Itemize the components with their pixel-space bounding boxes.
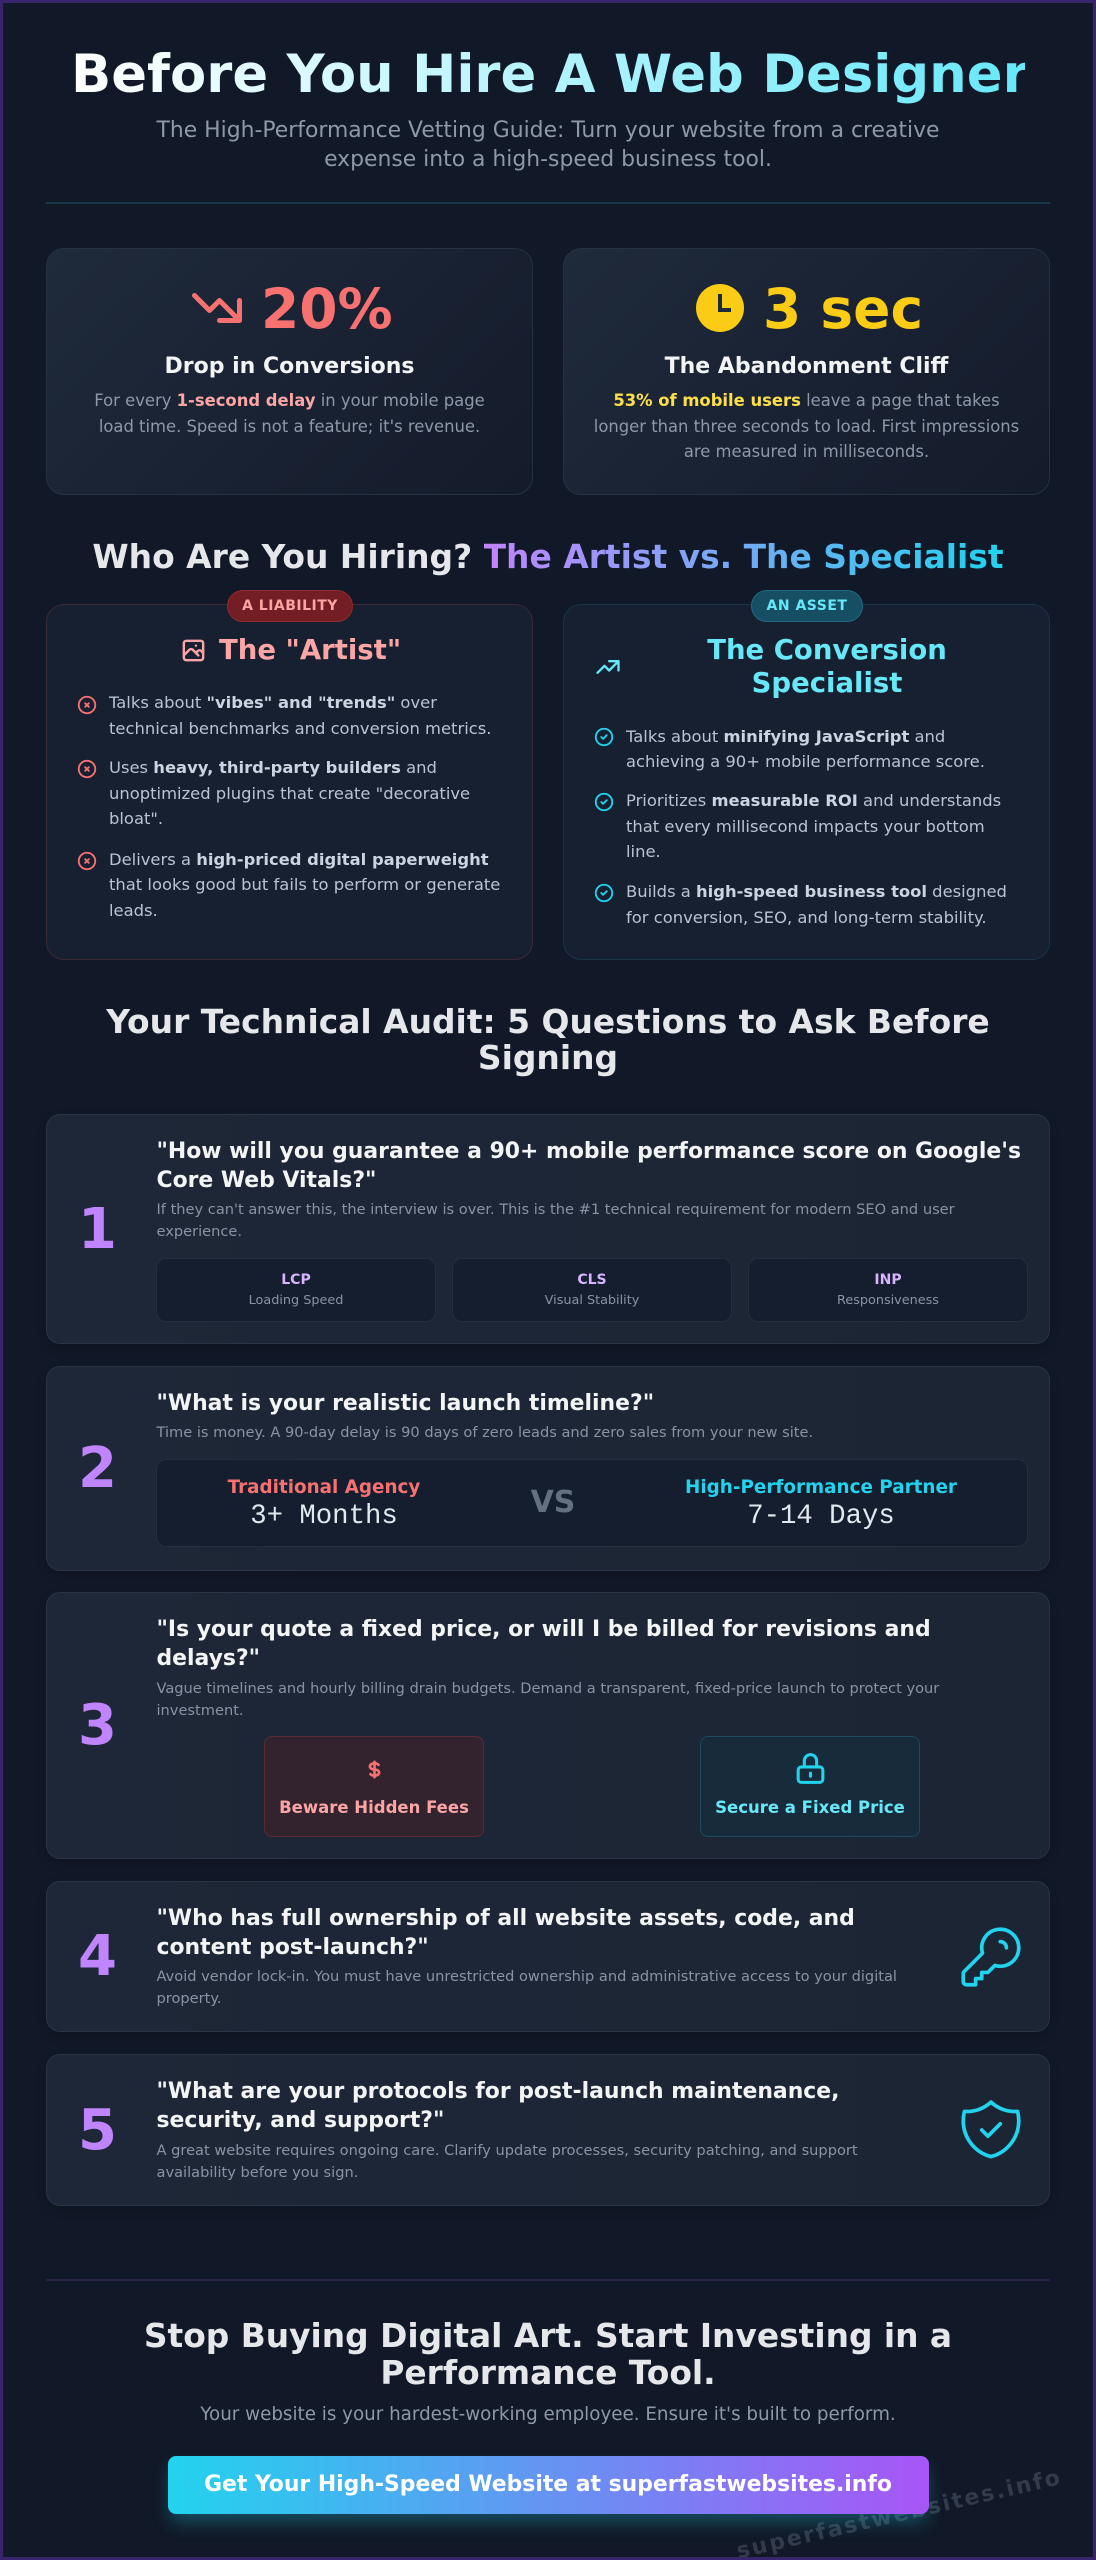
stat description: 53% of mobile users leave a page that takes xyxy=(613,391,1000,410)
panel: 20% stat xyxy=(46,248,533,495)
list item xyxy=(78,760,96,778)
stat description: For every 1-second delay in your mobile page xyxy=(94,391,485,410)
panel: question 4 xyxy=(46,1881,1050,2032)
subtitle: The High-Performance Vetting Guide: Turn your website from a creative xyxy=(156,118,940,143)
list text: Talks about "vibes" and "trends" over xyxy=(109,693,437,712)
icon: key xyxy=(961,1927,1021,1987)
call to action button xyxy=(168,2456,928,2514)
subtitle xyxy=(156,118,940,172)
badge: an asset: AN ASSET xyxy=(767,598,847,614)
list text xyxy=(108,693,491,738)
metric: LCP: LCP xyxy=(281,1272,311,1288)
description: availability before you sign. xyxy=(156,2164,358,2181)
number: 5 xyxy=(78,2098,117,2163)
icon: photograph xyxy=(182,640,204,662)
list text: unoptimized plugins that create "decorative xyxy=(109,784,470,803)
callout: fixed price xyxy=(700,1736,920,1837)
question: Core Web Vitals?" xyxy=(156,1168,376,1193)
icon: lock xyxy=(796,1753,824,1784)
list text: for conversion, SEO, and long-term stability. xyxy=(626,908,987,927)
stat description: longer than three seconds to load. First impressions xyxy=(594,417,1019,436)
question: "How will you guarantee a 90+ mobile performance score on Google's xyxy=(156,1139,1021,1164)
question: "What is your realistic launch timeline?" xyxy=(156,1391,654,1416)
icon: dollar xyxy=(368,1760,380,1778)
list item xyxy=(78,696,96,714)
list text: leads. xyxy=(109,901,158,920)
description: property. xyxy=(156,1990,222,2007)
panel: question 3 xyxy=(46,1592,1050,1859)
panel: question 2 xyxy=(46,1366,1050,1571)
list item xyxy=(594,792,614,812)
label: Beware Hidden Fees xyxy=(279,1798,469,1817)
question: "Is your quote a fixed price, or will I be billed for revisions and xyxy=(156,1617,931,1642)
description: Avoid vendor lock-in. You must have unrestricted ownership and administrative access to your digital xyxy=(156,1968,897,1985)
question: delays?" xyxy=(156,1646,260,1671)
question: security, and support?" xyxy=(156,2108,444,2133)
list text: Prioritizes measurable ROI and understands xyxy=(626,791,1001,810)
list text: Builds a high-speed business tool designed xyxy=(626,882,1007,901)
metric: INP: INP xyxy=(874,1272,902,1288)
heading: technical audit: Signing xyxy=(478,1038,618,1077)
heading: technical audit xyxy=(106,1002,990,1077)
versus: VS xyxy=(531,1485,575,1520)
number: 1 xyxy=(78,1197,117,1262)
question: "Who has full ownership of all website assets, code, and xyxy=(156,1906,855,1931)
stat description xyxy=(94,391,485,436)
card heading: The "Artist" xyxy=(219,634,401,666)
card heading: The Conversion xyxy=(707,634,947,666)
list text xyxy=(109,850,500,920)
closing heading: Performance Tool. xyxy=(380,2354,716,2392)
description: Time is money. A 90-day delay is 90 days of zero leads and zero sales from your new site. xyxy=(156,1424,813,1441)
list text: technical benchmarks and conversion metrics. xyxy=(109,719,491,738)
panel: 3 sec stat xyxy=(563,248,1050,495)
icon: trending down xyxy=(192,293,242,323)
list text xyxy=(626,726,985,771)
description: Vague timelines and hourly billing drain budgets. Demand a transparent, fixed-price launch to protect your xyxy=(156,1680,939,1697)
list text: bloat". xyxy=(109,809,163,828)
icon: clock xyxy=(696,284,744,332)
closing heading: Stop Buying Digital Art. Start Investing in a xyxy=(144,2317,952,2355)
traditional agency xyxy=(228,1477,420,1532)
metric: CLS: Visual Stability xyxy=(545,1293,639,1308)
list text: Uses heavy, third-party builders and xyxy=(109,758,437,777)
closing heading xyxy=(144,2317,952,2392)
metric: CLS: CLS xyxy=(577,1272,607,1288)
question xyxy=(156,2079,839,2133)
question xyxy=(156,1906,855,1960)
stat number: 20% xyxy=(261,277,393,341)
badge: a liability: A LIABILITY xyxy=(242,598,338,614)
question xyxy=(156,1139,1021,1193)
number: 2 xyxy=(78,1436,117,1501)
closing subtext: Your website is your hardest-working employee. Ensure it's built to perform. xyxy=(200,2404,896,2425)
metric: LCP xyxy=(156,1258,436,1322)
icon: trending up xyxy=(596,660,620,674)
card heading: Specialist xyxy=(752,667,902,699)
panel: question 5 xyxy=(46,2054,1050,2206)
timeline comparison xyxy=(156,1459,1028,1547)
description xyxy=(156,1680,940,1719)
badge: an asset xyxy=(751,590,863,622)
list text: achieving a 90+ mobile performance score. xyxy=(626,752,985,771)
metric: INP: Responsiveness xyxy=(837,1293,939,1308)
question: content post-launch?" xyxy=(156,1935,429,1960)
stat heading: Drop in Conversions xyxy=(164,354,415,379)
list item xyxy=(594,884,614,902)
stat description: load time. Speed is not a feature; it's revenue. xyxy=(99,417,480,436)
traditional agency: Traditional Agency xyxy=(228,1477,420,1498)
list text: Delivers a high-priced digital paperweight xyxy=(109,850,489,868)
list text: that looks good but fails to perform or generate xyxy=(109,875,500,894)
metric: CLS xyxy=(452,1258,732,1322)
description xyxy=(156,2142,858,2181)
number: 3 xyxy=(78,1693,117,1758)
traditional agency: 3+ Months xyxy=(250,1501,398,1532)
list item xyxy=(594,728,614,746)
description: investment. xyxy=(156,1702,244,1719)
list text: that every millisecond impacts your bottom xyxy=(626,817,985,836)
panel: the artist xyxy=(46,604,533,960)
callout: hidden fees xyxy=(264,1736,484,1837)
question xyxy=(156,1617,931,1671)
question: "What are your protocols for post-launch maintenance, xyxy=(156,2079,839,2104)
high performance partner: 7-14 Days xyxy=(747,1501,895,1532)
call to action button: Get Your High-Speed Website at superfastwebsites.info xyxy=(204,2472,892,2497)
metric: LCP: Loading Speed xyxy=(249,1293,343,1308)
heading: technical audit: Your Technical Audit: 5 Questions to Ask Before xyxy=(106,1002,990,1041)
description: experience. xyxy=(156,1223,242,1240)
stat description: are measured in milliseconds. xyxy=(684,442,929,461)
panel: question 1 xyxy=(46,1114,1050,1344)
title: Before You Hire A Web Designer xyxy=(71,44,1029,105)
metric: INP xyxy=(748,1258,1028,1322)
list text: line. xyxy=(626,842,661,861)
label: Secure a Fixed Price xyxy=(715,1798,905,1817)
heading: who are you hiring: Who Are You Hiring? The Artist vs. The Specialist xyxy=(92,537,1004,576)
stat heading: The Abandonment Cliff xyxy=(665,354,948,379)
subtitle: expense into a high-speed business tool. xyxy=(324,147,772,172)
card heading xyxy=(707,634,947,699)
list item xyxy=(78,852,96,870)
badge: a liability xyxy=(227,590,353,622)
number: 4 xyxy=(78,1924,117,1989)
high performance partner: High-Performance Partner xyxy=(685,1477,957,1498)
list text xyxy=(626,882,1007,927)
description: If they can't answer this, the interview is over. This is the #1 technical requirement for modern SEO and user xyxy=(156,1201,955,1218)
stat number: 3 sec xyxy=(763,277,923,341)
panel: the conversion specialist xyxy=(563,604,1050,960)
list text: Talks about minifying JavaScript and xyxy=(626,726,945,746)
description xyxy=(156,1968,897,2007)
list text xyxy=(109,758,470,828)
description: A great website requires ongoing care. Clarify update processes, security patching, and support xyxy=(156,2142,858,2159)
stat description xyxy=(594,391,1019,461)
high performance partner xyxy=(685,1477,957,1532)
description xyxy=(156,1201,955,1240)
icon: shield xyxy=(961,2100,1021,2158)
list text xyxy=(626,791,1001,861)
